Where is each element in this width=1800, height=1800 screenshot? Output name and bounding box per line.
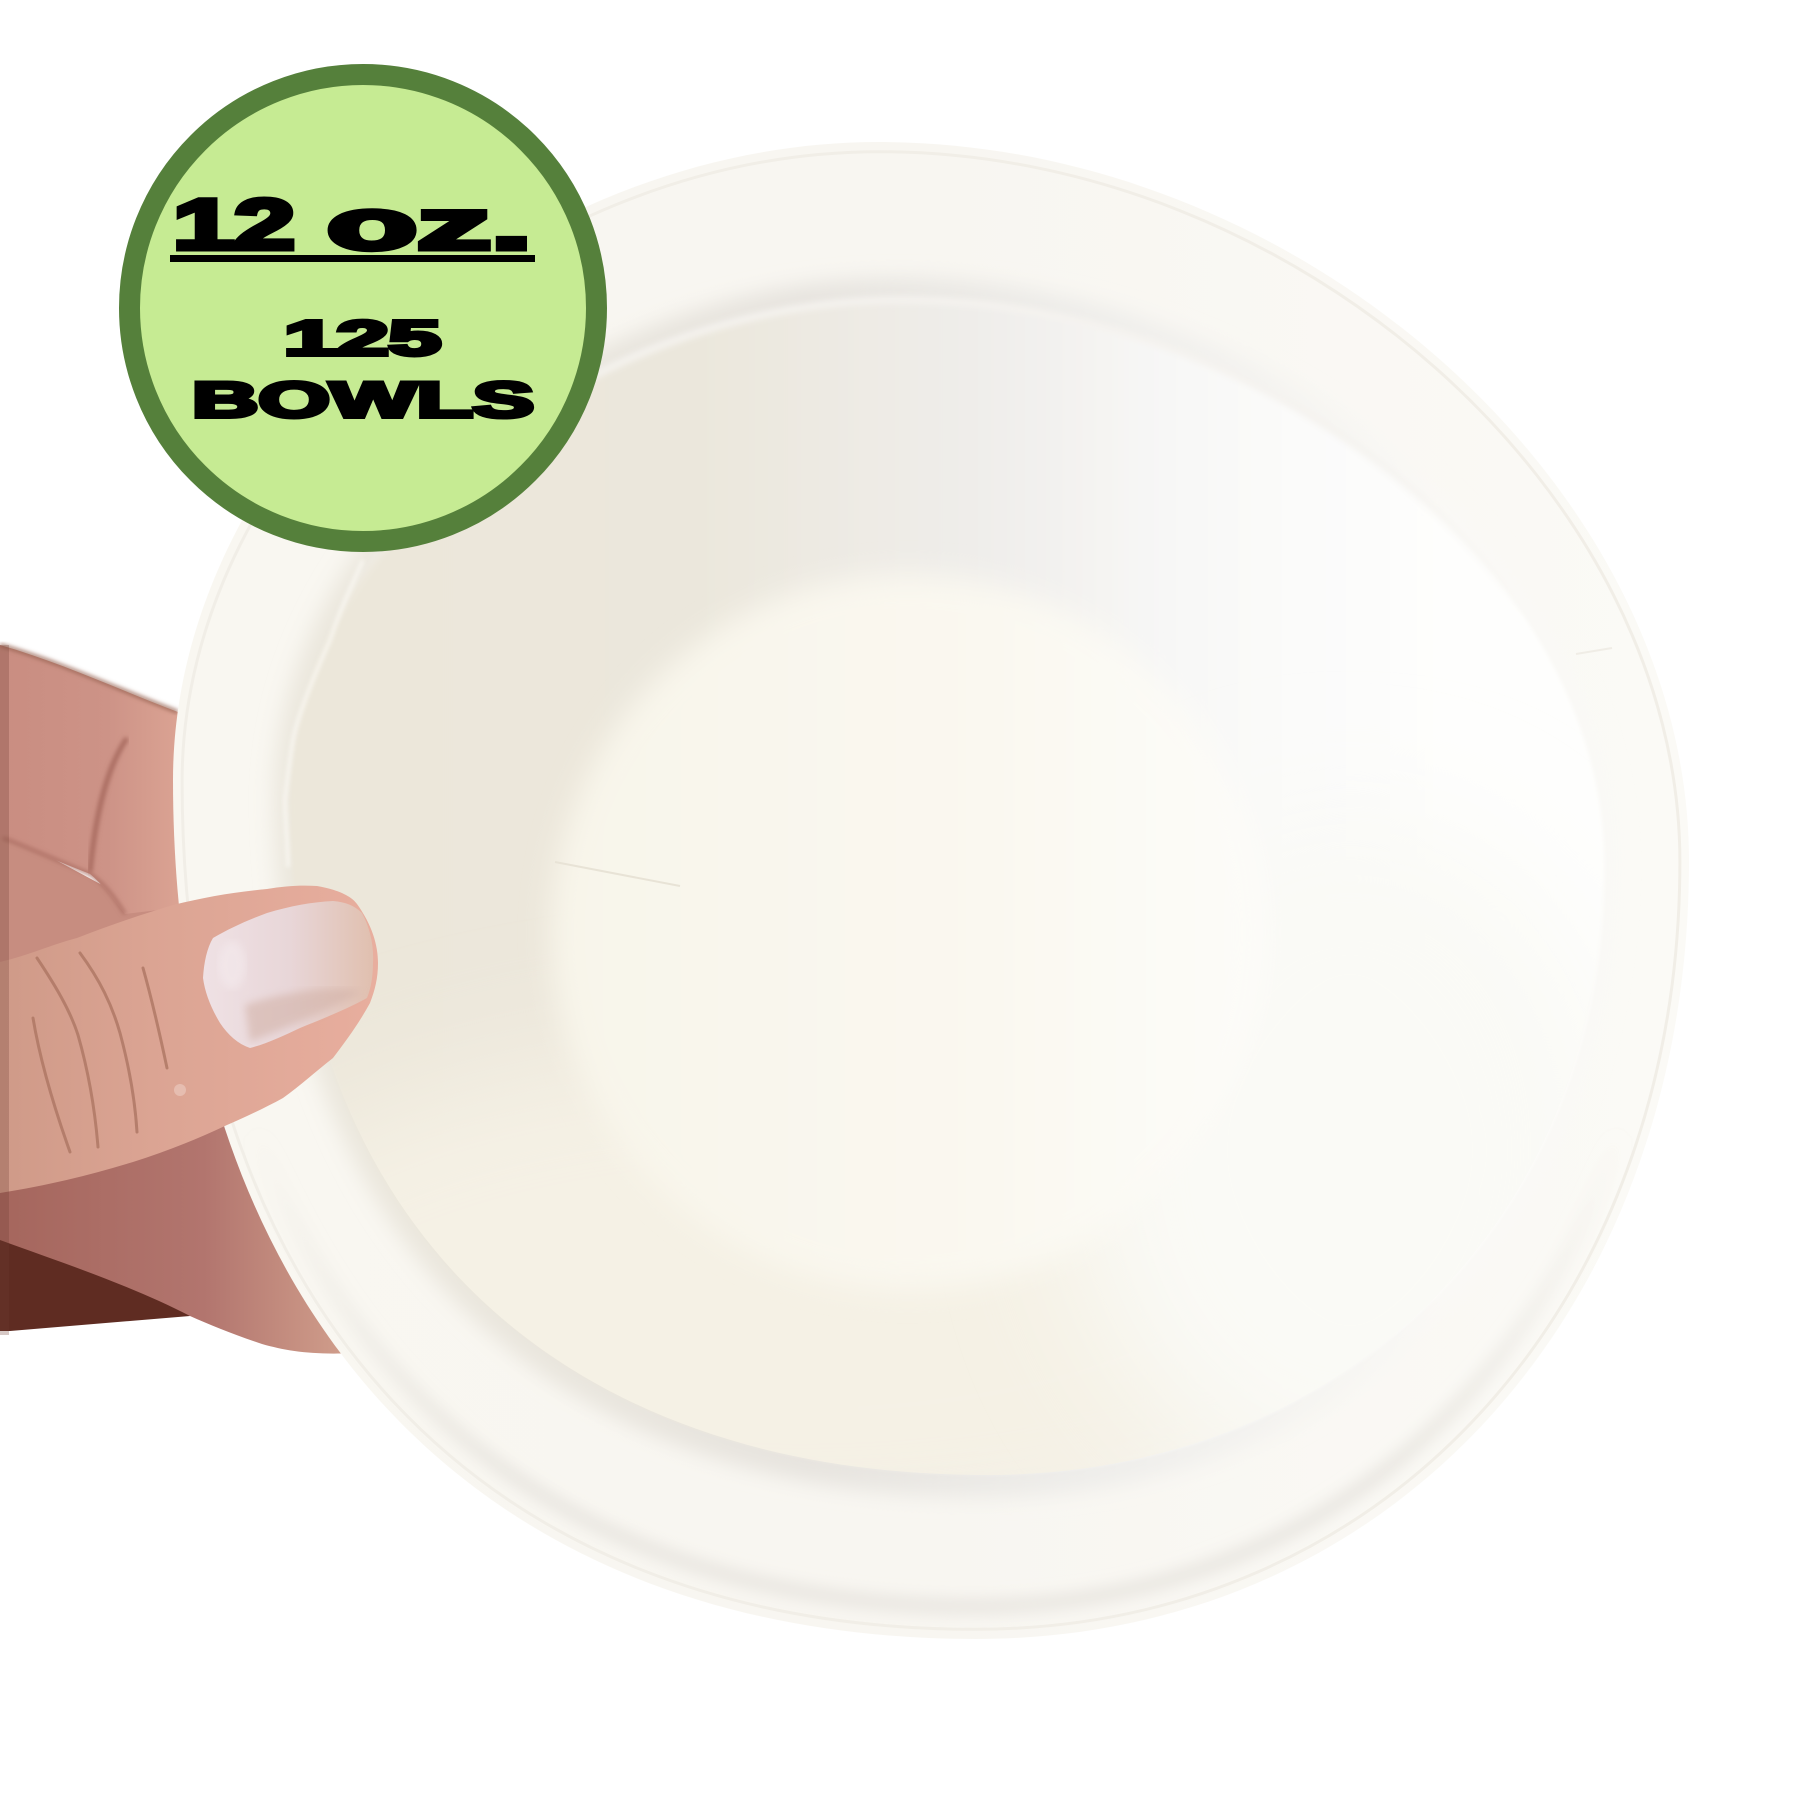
thumb nail <box>203 901 373 1048</box>
count label: BOWLS <box>192 372 534 428</box>
wavy rim edge left <box>285 560 363 867</box>
badge: 12 oz. 125 bowls <box>130 74 596 542</box>
thumb body <box>0 886 378 1193</box>
hand: fingers behind the bowl <box>0 645 370 1354</box>
lower rim shading <box>396 1342 1511 1614</box>
nail shimmer <box>218 941 246 989</box>
count number: 125 <box>284 312 441 366</box>
well bottom disc <box>552 581 1082 1280</box>
nail lower shade <box>245 989 362 1042</box>
size underline <box>170 255 535 262</box>
bowl outer rim <box>173 142 1689 1639</box>
thumb holding the bowl <box>0 645 378 1335</box>
hairline crease in disc <box>555 862 680 886</box>
lower fingers <box>0 1120 370 1354</box>
index finger <box>0 645 200 914</box>
middle finger <box>0 830 190 1000</box>
warm lower wall <box>374 1112 1212 1472</box>
thumb wrinkles <box>33 953 167 1152</box>
left edge strip <box>0 645 9 1335</box>
size label: 12 <box>173 186 295 265</box>
thumb wart <box>174 1084 186 1096</box>
bowl rim lip line <box>182 152 1680 1629</box>
wall highlight ridge <box>596 298 900 379</box>
bowl interior <box>272 278 1612 1614</box>
badge circle <box>130 74 596 542</box>
size label: oz. <box>327 186 532 265</box>
bowl <box>173 142 1689 1639</box>
rim crease right <box>1576 648 1612 654</box>
rim shadow band <box>272 278 1187 1494</box>
bowl wall <box>1138 346 1348 780</box>
